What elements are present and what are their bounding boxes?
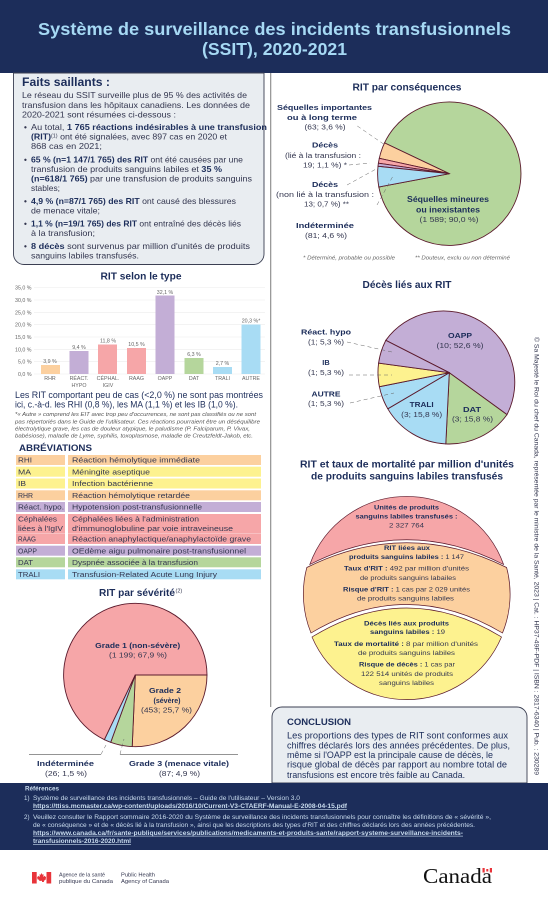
pie chart: décès liés aux RIT: DAT — [463, 405, 482, 414]
bar chart: RIT selon le type: OAPP — [158, 376, 173, 382]
footnote: autre — [14, 412, 261, 440]
footnotes: conséquences — [303, 256, 510, 262]
bar chart: RIT selon le type: CÉPHAL. — [97, 375, 119, 382]
bar chart: RIT selon le type: RHR — [44, 376, 56, 382]
panel: faits saillants: 4,9 % (n=87/1 765) des RIT ont causé des blessures — [31, 197, 236, 206]
band: RIT liées aux produits: de produits sanguins labailes — [360, 575, 457, 582]
panel: conclusion: chiffres déclarés lors des années précédentes. De plus, — [287, 740, 510, 750]
footnote: autre: *« Autre » comprend les EIT avec trop peu d'occurrences, ne sont pas classifiés ou ne sont — [15, 412, 256, 418]
logo: Agence de la santé publique du Canada: Agence de la santé — [59, 872, 105, 878]
table: abréviations: Céphalées liées à l'administration — [72, 514, 199, 524]
labels: conséquences: (non lié à la transfusion : — [276, 190, 374, 199]
table: abréviations: OEdème aigu pulmonaire post-transfusionnel — [72, 546, 246, 555]
panel: conclusion: transfusions est encore très faible au Canada. — [287, 770, 465, 780]
panel: conclusion: CONCLUSION — [287, 717, 351, 728]
footer: références: 2) — [24, 814, 30, 821]
bar chart: RIT selon le type: 5,0 % — [18, 360, 32, 366]
labels: conséquences: Décès — [312, 180, 338, 189]
footer: références: Veuillez consulter le Rapport sommaire 2016-2020 du Système de surveillance des incidents transfusionnels pour connaître les définitions de « sévérité », — [33, 814, 491, 821]
pie chart: décès liés aux RIT: (10; 52,6 %) — [436, 341, 484, 350]
band: décès liés aux produits — [312, 608, 502, 700]
note: types peu fréquents: Les RIT comportant peu de cas (<2,0 %) ne sont pas montrées — [15, 390, 263, 400]
heading: RIT selon le type: RIT selon le type — [100, 270, 182, 282]
band: décès liés aux produits: sanguins labiles : 19 — [370, 629, 445, 636]
band: décès liés aux produits: sanguins labiles — [379, 680, 435, 687]
table: abréviations: OAPP — [18, 546, 37, 555]
band: décès liés aux produits: Risque de décès : 1 cas par — [359, 662, 456, 669]
heading: taux de mortalité: RIT et taux de mortalité par million d'unités — [300, 458, 514, 470]
label: indéterminée — [29, 745, 106, 778]
footnotes: conséquences: * Déterminé, probable ou possible — [303, 256, 395, 262]
bar chart: RIT selon le type: 3,9 % — [43, 359, 57, 365]
table: abréviations: Réact. hypo. — [18, 503, 64, 512]
bar chart: RIT selon le type: RÉACT. — [70, 375, 88, 382]
panel: faits saillants: stables; — [31, 184, 60, 193]
copyright side text: © Sa Majesté le Roi du chef du Canada, représentée par le ministre de la Santé, 2023 | Cat. : HP37-49F-PDF | ISBN : 2817-6340 | Pub. : 230289 — [532, 337, 540, 776]
band: RIT liées aux produits: RIT liées aux — [384, 545, 430, 552]
labels: conséquences: (81; 4,6 %) — [305, 231, 347, 240]
heading: décès liés aux RIT: Décès liés aux RIT — [362, 279, 452, 291]
pie chart: RIT par sévérité: (453; 25,7 %) — [141, 705, 192, 714]
panel: faits saillants: sanguins labiles transfusés. — [31, 252, 139, 260]
bar chart: RIT selon le type: 2,7 % — [216, 361, 230, 367]
band: décès liés aux produits: Décès liés aux produits — [364, 620, 449, 627]
bar chart: RIT selon le type: 25,0 % — [15, 310, 32, 316]
labels: conséquences: (63; 3,6 %) — [304, 122, 346, 132]
labels: décès: (1; 5,3 %) — [308, 399, 344, 408]
table: abréviations: Réaction hémolytique immédiate — [72, 456, 200, 465]
panel: faits saillants: Faits saillants : — [22, 75, 110, 89]
labels: décès — [301, 328, 394, 408]
logo: Agence de la santé publique du Canada: Agency of Canada — [121, 879, 170, 885]
bar chart: RIT selon le type: 15,0 % — [15, 335, 32, 341]
table: abréviations: TRALI — [18, 570, 40, 579]
footer: références — [0, 783, 548, 850]
footnote: autre: électrolytique grave, les cas de douleur atypique, le paludisme (P. Falciparum, P. Vivax, — [15, 426, 250, 432]
title banner: Système de surveillance des incidents transfusionnels — [38, 19, 511, 39]
panel: faits saillants: (RIT) — [31, 132, 51, 142]
band: unités transfusées: Unités de produits — [374, 504, 439, 512]
table: abréviations: IB — [18, 479, 26, 488]
panel: faits saillants: ont été signalées, avec 897 cas en 2020 et — [58, 132, 228, 142]
table: abréviations: DAT — [18, 558, 34, 567]
band: RIT liées aux produits: Risque d'RIT : 1 cas par 2 029 unités — [343, 587, 471, 594]
footnotes: conséquences: ** Douteux, exclu ou non déterminé — [415, 256, 510, 262]
table: abréviations: Réaction hémolytique retardée — [72, 491, 190, 500]
bar chart: RIT selon le type: DAT — [189, 376, 200, 382]
logo: Agence de la santé publique du Canada: publique du Canada — [59, 879, 114, 885]
logo: Agence de la santé publique du Canada: Public Health — [121, 872, 155, 878]
label: grade 3: (87; 4,9 %) — [159, 769, 200, 778]
band: RIT liées aux produits: de produits sanguins labiles — [357, 596, 455, 603]
panel: faits saillants: 1,1 % (n=19/1 765) des RIT ont entraîné des décès liés — [31, 220, 241, 228]
panel: faits saillants: Au total, 1 765 réactions indésirables à une transfusion — [31, 123, 267, 132]
bar chart: RIT selon le type: 10,0 % — [15, 347, 32, 353]
band: décès liés aux produits: de produits sanguins labiles — [358, 650, 456, 657]
bar chart: RIT selon le type: IGIV — [103, 383, 114, 389]
footer: références: de « conséquence » et de « décès lié à la transfusion », ainsi que les descriptions des types d'RIT et des chiffres déclarés lors des années précédentes. — [33, 822, 475, 829]
table: abréviations: Dyspnée associée à la transfusion — [72, 558, 198, 567]
table: abréviations: d'immunoglobuline par voie intraveineuse — [72, 524, 233, 533]
table: abréviations: RHI — [18, 456, 32, 465]
panel: faits saillants: 65 % (n=1 147/1 765) des RIT ont été causées par une — [31, 156, 244, 164]
table: abréviations: RAAG — [18, 535, 36, 544]
title banner: (SSIT), 2020-2021 — [202, 39, 347, 59]
panel: faits saillants: 868 cas en 2021; — [31, 142, 102, 151]
band: décès liés aux produits: 122 514 unités de produits — [361, 671, 454, 678]
footer: références: https://www.canada.ca/fr/sante-publique/services/publications/medicaments-et-produits-sante/rapport-systeme-surveillance-incidents- — [33, 830, 463, 837]
note: types peu fréquents — [15, 390, 263, 410]
pie chart: RIT par sévérité: Grade 1 (non-sévère) — [95, 641, 181, 650]
table: abréviations: Céphalées — [18, 514, 57, 524]
panel: faits saillants: 8 décès sont survenus par million d'unités de produits — [31, 242, 250, 251]
labels: décès: IB — [322, 358, 330, 367]
panel: faits saillants: • — [24, 156, 27, 164]
panel: faits saillants: Le réseau du SSIT surveille plus de 95 % des activités de — [22, 91, 248, 100]
panel: conclusion: même si l'OAPP est la principale cause de décès, le — [287, 750, 493, 760]
pie chart: RIT par sévérité: (sévère) — [154, 696, 181, 705]
panel: faits saillants: 2020-2021 sont résumées ci-dessous : — [22, 110, 176, 120]
panel: faits saillants: transfusion dans les hôpitaux canadiens. Les données de — [22, 101, 251, 110]
band: unités transfusées: 2 327 764 — [389, 522, 424, 529]
panel: faits saillants: • — [24, 220, 27, 228]
footer: références: Système de surveillance des incidents transfusionnels – Guide de l'utilisateur – Version 3.0 — [33, 795, 301, 802]
band: unités transfusées: sanguins labiles transfusés : — [356, 513, 458, 520]
panel: faits saillants: à la transfusion; — [31, 229, 95, 238]
pie chart: RIT par sévérité: Grade 2 — [149, 686, 181, 695]
labels: décès: (1; 5,3 %) — [308, 368, 344, 377]
table: abréviations: RHR — [18, 491, 33, 500]
table: abréviations — [16, 455, 261, 579]
pie chart: décès liés aux RIT: TRALI — [410, 400, 434, 409]
heading: abréviations: ABRÉVIATIONS — [19, 443, 92, 454]
pie chart: RIT par sévérité: (1 199; 67,9 %) — [109, 651, 167, 660]
labels: décès: Réact. hypo — [301, 328, 352, 337]
band: RIT liées aux produits: produits sanguins labiles : 1 147 — [349, 554, 464, 561]
pie chart: décès liés aux RIT: (3; 15,8 %) — [452, 414, 493, 424]
heading: taux de mortalité — [300, 458, 514, 482]
panel: conclusion: risque global de décès par rapport au nombre total de — [287, 760, 507, 770]
pie chart: RIT par sévérité — [64, 603, 207, 747]
bar chart: RIT selon le type: 20,3 %* — [242, 318, 260, 324]
table: abréviations: Réaction anaphylactique/anaphylactoïde grave — [72, 535, 251, 544]
bar chart: RIT selon le type: 6,3 % — [187, 352, 201, 358]
pie chart: décès liés aux RIT — [378, 311, 515, 444]
footnote: autre: babésiose), maladie de Lyme, syphilis, toxoplasmose, maladie de Creutzfeldt-Jakob, etc. — [15, 434, 253, 440]
labels: conséquences — [276, 103, 393, 240]
table: abréviations: Transfusion-Related Acute Lung Injury — [72, 570, 217, 579]
heading: RIT par sévérité: RIT par sévérité — [99, 587, 175, 599]
note: types peu fréquents: ici, c.-à-d. les RHI (0,8 %), les MA (1,1 %) et les IB (1,0 %). — [15, 400, 238, 410]
footer: références: Références — [25, 786, 60, 793]
bar chart: RIT selon le type: 35,0 % — [15, 286, 32, 292]
table: abréviations: liées à l'IgIV — [18, 524, 63, 533]
bar chart: RIT selon le type: TRALI — [215, 376, 230, 382]
panel: faits saillants: de menace vitale; — [31, 206, 100, 216]
heading: taux de mortalité: de produits sanguins labiles transfusés — [311, 470, 503, 482]
label: grade 3 — [120, 739, 238, 778]
pie chart: RIT par conséquences: ou inexistantes — [416, 205, 481, 214]
bar chart: RIT selon le type — [15, 286, 265, 389]
footer: références: https://ttiss.mcmaster.ca/wp-content/uploads/2016/10/Current-V3-CTAERF-Manual-E-2008-04-15.pdf — [33, 803, 348, 810]
bar chart: RIT selon le type: 20,0 % — [15, 323, 32, 329]
table: abréviations: Infection bactérienne — [72, 479, 153, 488]
panel: faits saillants — [14, 73, 267, 264]
bar chart: RIT selon le type: 0,0 % — [18, 372, 32, 378]
footer: références: transfusionnels-2016-2020.html — [33, 838, 131, 845]
labels: conséquences: 19; 1,1 %) * — [303, 160, 347, 170]
bar chart: RIT selon le type: 9,4 % — [72, 345, 86, 351]
panel: faits saillants: transfusion de produits sanguins labiles et 35 % — [31, 165, 222, 174]
band: RIT liées aux produits: Taux d'RIT : 492 par million d'unités — [344, 566, 470, 573]
panel: conclusion: Les proportions des types de RIT sont conformes aux — [287, 730, 509, 740]
labels: décès: (1; 5,3 %) — [308, 338, 344, 346]
label: indéterminée: (26; 1,5 %) — [45, 769, 87, 778]
labels: conséquences: ou à long terme — [287, 113, 357, 122]
bar chart: RIT selon le type: 32,1 % — [157, 290, 174, 296]
panel: faits saillants: (n=618/1 765) par une transfusion de produits sanguins — [31, 174, 252, 184]
pie chart: décès liés aux RIT: OAPP — [448, 331, 472, 340]
label: indéterminée: Indéterminée — [37, 759, 94, 768]
bar chart: RIT selon le type: 10,5 % — [128, 342, 145, 348]
band: décès liés aux produits: Taux de mortalité : 8 par million d'unités — [334, 641, 479, 648]
table: abréviations: Hypotension post-transfusionnelle — [72, 503, 202, 512]
labels: conséquences: 13; 0,7 %) ** — [304, 200, 349, 208]
table: abréviations: MA — [18, 467, 31, 476]
bar chart: RIT selon le type: 11,8 % — [100, 338, 116, 344]
labels: décès: AUTRE — [312, 389, 341, 398]
footnote: autre: pas répertoriés dans le Guide de l'utilisateur. Ces réactions pourraient être un déséquilibre — [14, 419, 261, 425]
logo: Agence de la santé publique du Canada — [32, 872, 170, 885]
pie chart: RIT par conséquences: (1 589; 90,0 %) — [420, 215, 478, 224]
title banner — [0, 0, 548, 73]
panel: conclusion — [272, 707, 527, 783]
labels: conséquences: Décès — [312, 140, 338, 150]
footer: références: 1) — [24, 795, 30, 802]
band: RIT liées aux produits — [303, 543, 510, 633]
labels: conséquences: Indéterminée — [296, 221, 354, 230]
panel: faits saillants: • — [24, 197, 27, 206]
pie chart: décès liés aux RIT: (3; 15,8 %) — [401, 410, 442, 419]
pie chart: RIT par conséquences — [378, 102, 521, 245]
label: grade 3: Grade 3 (menace vitale) — [129, 759, 230, 768]
bar chart: RIT selon le type: HYPO — [71, 383, 87, 389]
heading: RIT par conséquences: RIT par conséquences — [352, 82, 462, 94]
labels: conséquences: (lié à la transfusion : — [285, 151, 361, 160]
logo: Canada wordmark: Canada — [423, 864, 493, 888]
panel: faits saillants: • — [24, 242, 27, 251]
diagram: sphère des taux de mortalité — [303, 496, 510, 700]
panel: faits saillants: (1) — [51, 134, 58, 140]
bar chart: RIT selon le type: RAAG — [129, 376, 144, 382]
bar chart: RIT selon le type: 30,0 % — [15, 298, 32, 304]
heading: RIT par sévérité: (2) — [176, 588, 182, 594]
labels: conséquences: Séquelles importantes — [277, 103, 372, 112]
band: unités transfusées — [310, 496, 504, 564]
pie chart: RIT par conséquences: Séquelles mineures — [407, 195, 490, 204]
table: abréviations: Méningite aseptique — [72, 467, 150, 476]
bar chart: RIT selon le type: AUTRE — [242, 376, 260, 382]
panel: faits saillants: • — [24, 123, 27, 132]
